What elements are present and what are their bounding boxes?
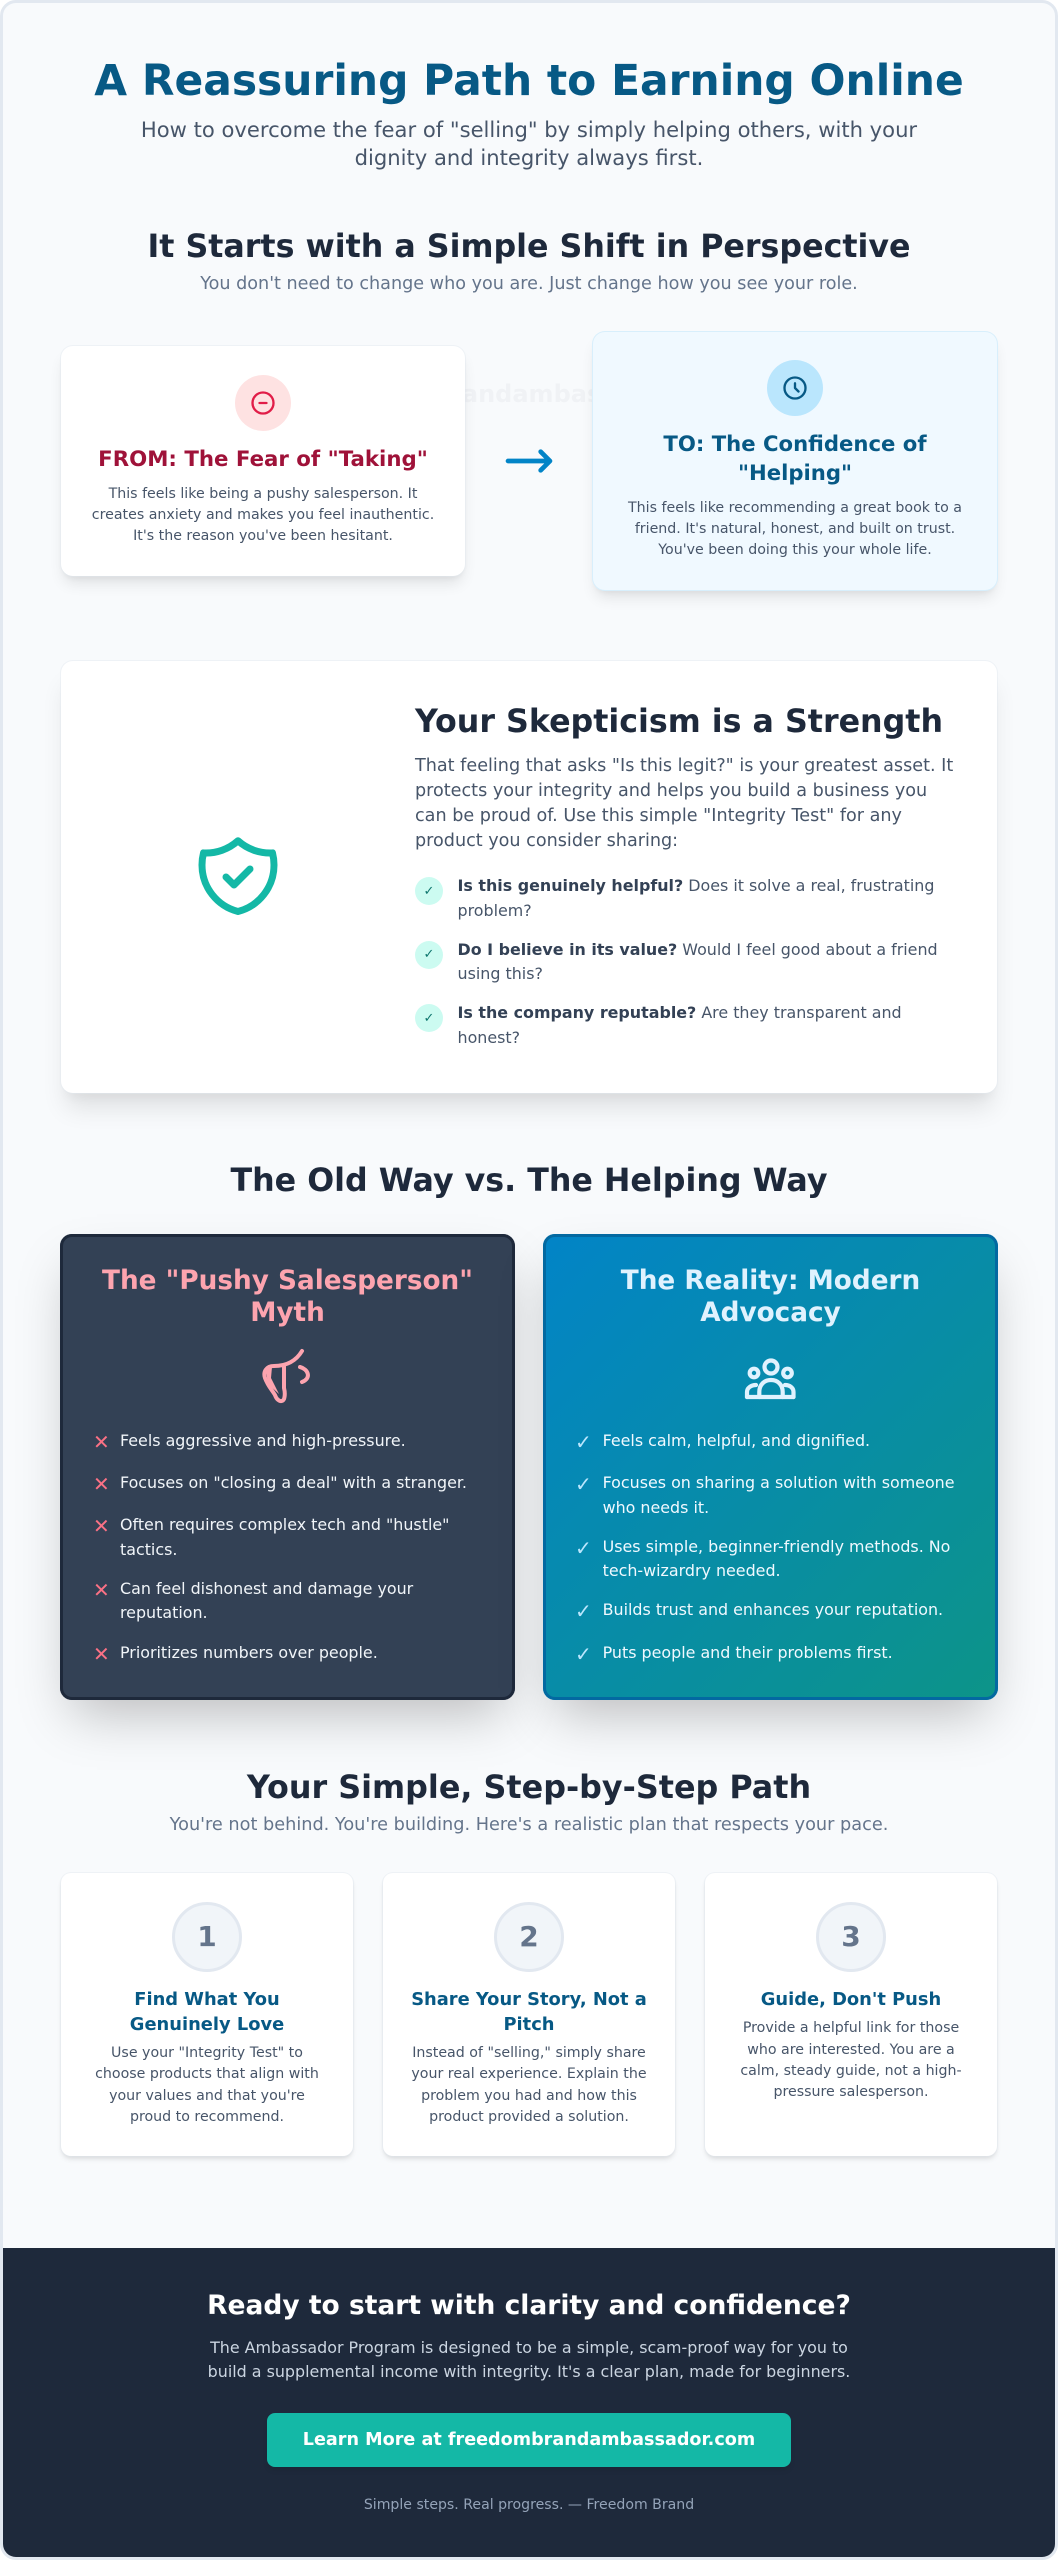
item 3: honest? [458, 1028, 520, 1047]
check 1: ✓ [424, 884, 434, 898]
step 1 text: your values and that you're [109, 2088, 305, 2104]
step 3 text: Provide a helpful link for those [743, 2020, 959, 2036]
panel: to confidence of helping [593, 332, 997, 590]
check 1 [415, 877, 443, 905]
text: who needs it. [603, 1498, 709, 1517]
item 1 [458, 876, 934, 920]
text [603, 1473, 955, 1517]
text: Feels aggressive and high-pressure. [120, 1431, 406, 1450]
subheading: perspective: You don't need to change who you are. Just change how you see your role. [200, 274, 858, 294]
number 1 [172, 1902, 242, 1972]
text: Focuses on sharing a solution with someone [603, 1473, 955, 1492]
skepticism heading: Your Skepticism is a Strength [415, 704, 943, 740]
step 1 heading: Find What You [134, 1988, 280, 2010]
myth item 5 [93, 1642, 378, 1666]
to heading: TO: The Confidence of [663, 431, 927, 456]
item 3: Is the company reputable? Are they transparent and [458, 1003, 902, 1022]
step 2 text: Instead of "selling," simply share [412, 2045, 646, 2061]
step 2 heading: Share Your Story, Not a [411, 1988, 647, 2010]
text: Uses simple, beginner-friendly methods. No [603, 1537, 950, 1556]
cta button: Learn More at freedombrandambassador.com [303, 2430, 755, 2450]
myth heading: Myth [250, 1298, 325, 1328]
item 1: Is this genuinely helpful? Does it solve a real, frustrating [458, 876, 934, 895]
advocacy item 4 [575, 1599, 943, 1623]
arrow [506, 449, 552, 473]
step 2 heading: Pitch [503, 2014, 554, 2034]
number 3: 3 [841, 1920, 861, 1953]
number 1: 1 [197, 1920, 217, 1953]
number 2: 2 [519, 1920, 539, 1953]
to text [628, 500, 962, 558]
subtitle [141, 117, 918, 170]
from text: This feels like being a pushy salesperson. It [109, 486, 417, 502]
footer note: Simple steps. Real progress. — Freedom Brand [364, 2497, 694, 2513]
cross mark: ✕ [93, 1578, 110, 1602]
check mark: ✓ [575, 1536, 592, 1560]
icon: shield check [198, 837, 278, 915]
panel: pushy salesperson myth [60, 1234, 515, 1700]
skepticism text: product you consider sharing: [415, 831, 678, 851]
cross mark: ✕ [93, 1472, 110, 1496]
step 3 text: who are interested. You are a [747, 2042, 955, 2058]
myth heading: The "Pushy Salesperson" [102, 1266, 473, 1296]
watermark: freedombrandambassador.com [319, 380, 739, 408]
step 1 text: Use your "Integrity Test" to [111, 2045, 303, 2061]
myth item 1 [93, 1430, 406, 1454]
text: Puts people and their problems first. [603, 1642, 893, 1662]
step 1 heading: Genuinely Love [130, 2014, 284, 2034]
step 2 text: problem you had and how this [421, 2088, 637, 2104]
step 2 text: product provided a solution. [429, 2109, 629, 2125]
myth item 3 [93, 1514, 449, 1559]
step 1 text: proud to recommend. [130, 2109, 284, 2125]
text: tech-wizardry needed. [603, 1561, 781, 1580]
to text: friend. It's natural, honest, and built on trust. [635, 520, 955, 536]
text [120, 1515, 449, 1559]
panel: step 1 [61, 1873, 353, 2156]
check mark: ✓ [575, 1472, 592, 1496]
cta button [267, 2413, 791, 2467]
text: Often requires complex tech and "hustle" [120, 1515, 449, 1534]
subheading: steps: You're not behind. You're building. Here's a realistic plan that respects your pace. [170, 1815, 888, 1835]
item 1: problem? [458, 901, 532, 920]
check mark: ✓ [575, 1599, 592, 1623]
panel: step 3 [705, 1873, 997, 2156]
text: Can feel dishonest and damage your [120, 1579, 413, 1598]
to text: You've been doing this your whole life. [658, 542, 932, 558]
step 1 text [95, 2045, 319, 2125]
panel: call to action [3, 2248, 1055, 2557]
from text: It's the reason you've been hesitant. [133, 528, 393, 544]
step 3 text [740, 2020, 962, 2100]
subtitle: dignity and integrity always first. [355, 145, 703, 170]
check 3 [415, 1004, 443, 1032]
advocacy item 3 [575, 1536, 950, 1580]
icon: minus circle [235, 375, 291, 431]
number 3 [816, 1902, 886, 1972]
cross mark: ✕ [93, 1642, 110, 1666]
skepticism text: can be proud of. Use this simple "Integrity Test" for any [415, 806, 902, 826]
icon: clock [767, 360, 823, 416]
check 2: ✓ [424, 947, 434, 962]
item 2: using this? [458, 964, 543, 983]
cta heading: Ready to start with clarity and confidence? [207, 2290, 851, 2321]
advocacy item 2 [575, 1472, 955, 1517]
advocacy item 1 [575, 1430, 870, 1454]
cta text: The Ambassador Program is designed to be a simple, scam-proof way for you to [210, 2338, 848, 2357]
check mark: ✓ [575, 1430, 592, 1454]
heading: steps: Your Simple, Step-by-Step Path [247, 1769, 811, 1806]
myth item 2 [93, 1472, 467, 1496]
step 1 text: choose products that align with [95, 2066, 319, 2082]
item 2: Do I believe in its value? Would I feel good about a friend [458, 940, 938, 958]
step 2 heading [411, 1988, 647, 2034]
number 2 [494, 1902, 564, 1972]
skepticism text [414, 756, 953, 851]
step 3 text: pressure salesperson. [773, 2084, 929, 2100]
step 1 heading [130, 1988, 284, 2034]
from heading: FROM: The Fear of "Taking" [98, 446, 428, 472]
text: Builds trust and enhances your reputation. [603, 1600, 943, 1619]
text: Focuses on "closing a deal" with a stranger. [120, 1473, 467, 1492]
step 2 text: your real experience. Explain the [411, 2066, 647, 2082]
myth heading [102, 1266, 473, 1328]
cross mark: ✕ [93, 1514, 110, 1538]
advocacy heading: The Reality: Modern [621, 1266, 920, 1296]
icon: megaphone [262, 1348, 310, 1404]
item 2 [458, 940, 938, 983]
text: reputation. [120, 1603, 208, 1622]
text [603, 1537, 950, 1580]
panel: skepticism is a strength [61, 661, 997, 1093]
advocacy heading [620, 1266, 920, 1328]
cross mark: ✕ [93, 1430, 110, 1454]
skepticism text: protects your integrity and helps you build a business you [415, 781, 927, 801]
to heading: "Helping" [738, 460, 852, 485]
check mark: ✓ [575, 1642, 592, 1666]
from text [92, 486, 434, 544]
cta text [208, 2338, 850, 2381]
check 2 [415, 941, 443, 969]
panel: modern advocacy [543, 1234, 998, 1700]
panel: from fear of taking [61, 346, 465, 576]
text [120, 1579, 414, 1622]
step 3 heading: Guide, Don't Push [761, 1988, 941, 2010]
heading: comparison: The Old Way vs. The Helping Way [230, 1163, 828, 1199]
advocacy heading: Advocacy [700, 1298, 841, 1328]
subtitle: How to overcome the fear of "selling" by simply helping others, with your [141, 117, 917, 142]
myth item 4 [93, 1578, 414, 1622]
item 3 [458, 1003, 902, 1047]
from text: creates anxiety and makes you feel inauthentic. [92, 506, 434, 522]
cta text: build a supplemental income with integrity. It's a clear plan, made for beginners. [208, 2362, 850, 2381]
to heading [663, 431, 927, 485]
panel: step 2 [383, 1873, 675, 2156]
heading: perspective: It Starts with a Simple Shift in Perspective [147, 229, 911, 265]
skepticism text: That feeling that asks "Is this legit?" is your greatest asset. It [415, 756, 953, 776]
check 3: ✓ [424, 1010, 434, 1026]
title: A Reassuring Path to Earning Online [94, 56, 964, 105]
icon: people group [744, 1358, 796, 1400]
step 3 text: calm, steady guide, not a high- [740, 2063, 962, 2079]
step 2 text [411, 2045, 647, 2125]
text: Prioritizes numbers over people. [120, 1642, 378, 1662]
advocacy item 5 [575, 1642, 893, 1666]
text: tactics. [120, 1540, 177, 1559]
text: Feels calm, helpful, and dignified. [603, 1431, 870, 1450]
to text: This feels like recommending a great book to a [628, 500, 962, 516]
